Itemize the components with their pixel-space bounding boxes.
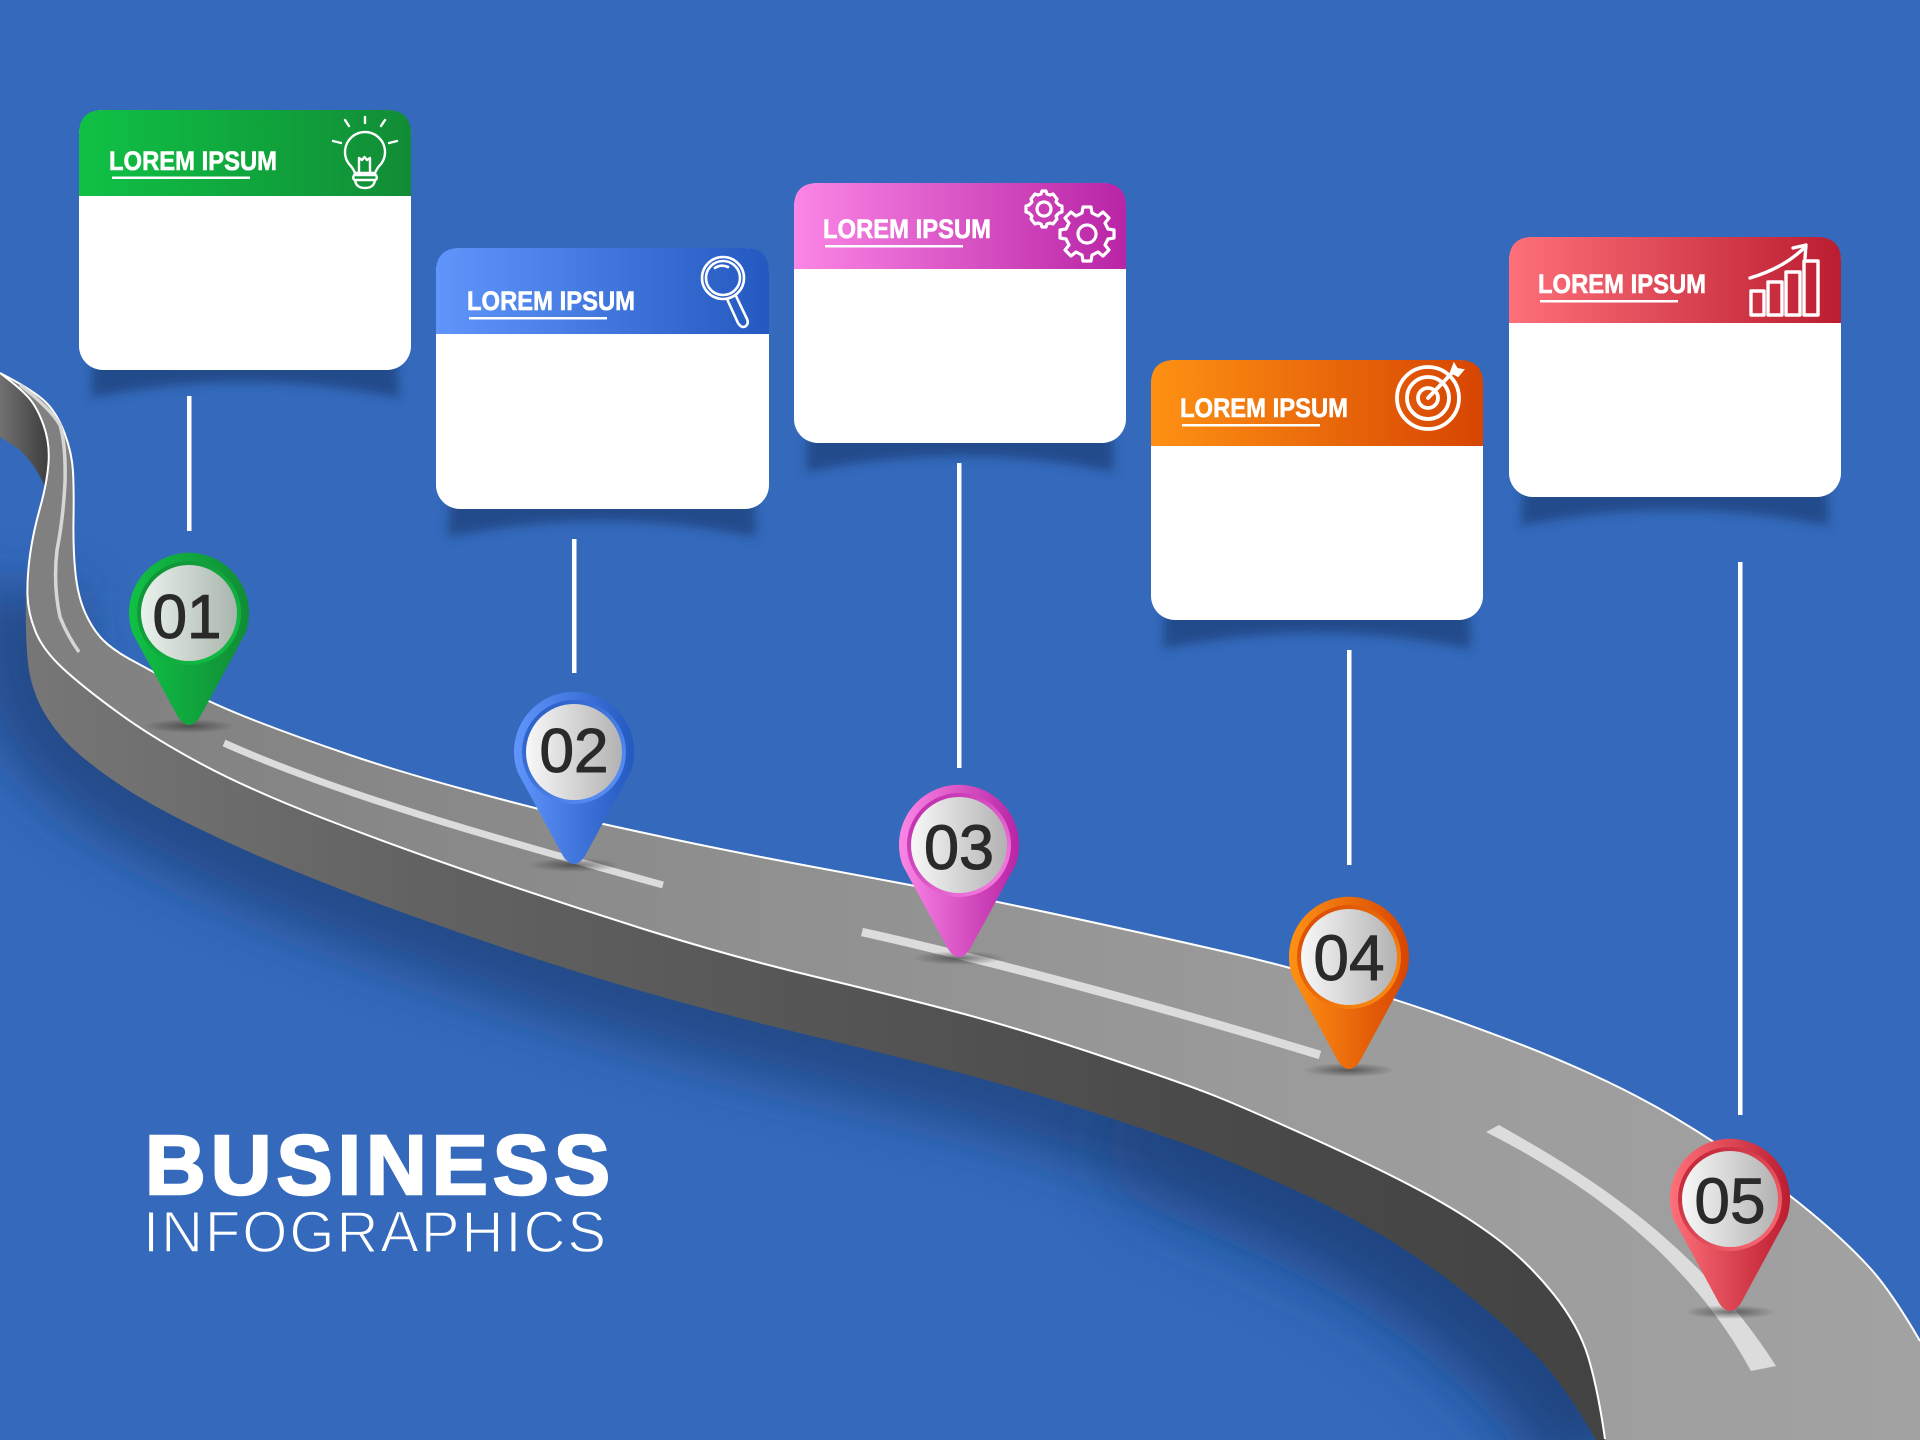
icon: light bulb (333, 117, 397, 188)
card 2 header (436, 248, 769, 334)
pin 02 body (514, 692, 634, 864)
pin 04 (1289, 897, 1409, 1077)
card 5 heading: LOREM IPSUM (1538, 269, 1706, 299)
pin 04 body (1289, 897, 1409, 1069)
pin 02 ground shadow (528, 858, 620, 872)
pin 05 ring (1678, 1147, 1782, 1251)
panel: card 5 (1509, 237, 1841, 526)
card 3 heading underline (825, 245, 963, 248)
card 2 heading: LOREM IPSUM (467, 286, 635, 316)
card 4 heading underline (1182, 424, 1320, 426)
card 1 header (79, 110, 411, 196)
card 3 body (794, 183, 1126, 443)
pin 01 (129, 553, 249, 733)
road surface (0, 373, 1920, 1440)
pin 02 ring (522, 700, 626, 804)
card 1 shadow (91, 360, 399, 398)
pin 02 (514, 692, 634, 872)
icon: gears (1026, 191, 1114, 261)
pin 03 ring (907, 793, 1011, 897)
road lane dash 3 (862, 932, 1320, 1055)
card 1 heading underline (112, 176, 250, 179)
road far side wall (0, 373, 49, 487)
pin 04 ring (1297, 905, 1401, 1009)
card 3 heading: LOREM IPSUM (823, 214, 991, 244)
connector line 5 (1738, 562, 1742, 1115)
card 4 shadow (1163, 610, 1471, 649)
card 2 shadow (448, 498, 756, 537)
pin 03 number: 03 (924, 813, 994, 883)
connector line 2 (572, 539, 576, 673)
card 5 shadow (1521, 487, 1829, 526)
pin 01 number: 01 (153, 583, 221, 652)
pin 03 disc (911, 797, 1007, 893)
pin 01 body (129, 553, 249, 725)
pin 01 ground shadow (143, 719, 235, 733)
card 2 body (436, 248, 769, 509)
road upper edge line (0, 373, 1920, 1341)
pin 05 ground shadow (1684, 1305, 1776, 1319)
pin 03 (899, 785, 1019, 965)
card 2 heading underline (469, 317, 607, 320)
title (143, 1118, 610, 1265)
pin 01 ring (137, 561, 241, 665)
title line: business: BUSINESS (145, 1118, 610, 1212)
panel: card 1 (79, 110, 411, 398)
card 5 header (1509, 237, 1841, 323)
road cast shadow, lower right (1183, 1142, 1596, 1440)
pin 02 disc (526, 704, 622, 800)
card 3 header (794, 183, 1126, 269)
card 1 body (79, 110, 411, 370)
card 4 body (1151, 360, 1483, 620)
road (0, 373, 1920, 1440)
road front side wall (26, 590, 1605, 1440)
road lane dash 1 (20, 385, 79, 652)
pin 05 number: 05 (1694, 1165, 1766, 1237)
pin 03 ground shadow (913, 951, 1005, 965)
connector line 3 (957, 463, 962, 768)
pin 05 disc (1682, 1151, 1778, 1247)
pin 04 disc (1301, 909, 1397, 1005)
card 5 body (1509, 237, 1841, 497)
card 3 shadow (806, 433, 1114, 472)
icon: target with arrow (1397, 364, 1463, 429)
panel: card 4 (1151, 360, 1483, 649)
pin 01 disc (141, 565, 237, 661)
icon: magnifying glass (702, 257, 748, 327)
card 4 heading: LOREM IPSUM (1180, 393, 1348, 423)
road lower edge line (0, 373, 1605, 1439)
title line: infographics: INFOGRAPHICS (143, 1200, 606, 1265)
card 5 heading underline (1540, 300, 1678, 302)
panel: card 3 (794, 183, 1126, 472)
card 4 header (1151, 360, 1483, 446)
pin 05 (1670, 1139, 1790, 1319)
icon: growth bar chart (1750, 245, 1818, 315)
pin 04 ground shadow (1303, 1063, 1395, 1077)
panel: card 2 (436, 248, 769, 537)
connector line 1 (187, 396, 192, 531)
pin 04 number: 04 (1313, 922, 1385, 994)
road lane dash 5 (1486, 1125, 1776, 1371)
pin 02 number: 02 (540, 717, 608, 786)
road cast shadow (26, 590, 1596, 1440)
pin 03 body (899, 785, 1019, 957)
pin 05 body (1670, 1139, 1790, 1311)
card 1 heading: LOREM IPSUM (109, 146, 277, 176)
road lane dash 2 (224, 743, 663, 885)
connector line 4 (1347, 650, 1352, 865)
